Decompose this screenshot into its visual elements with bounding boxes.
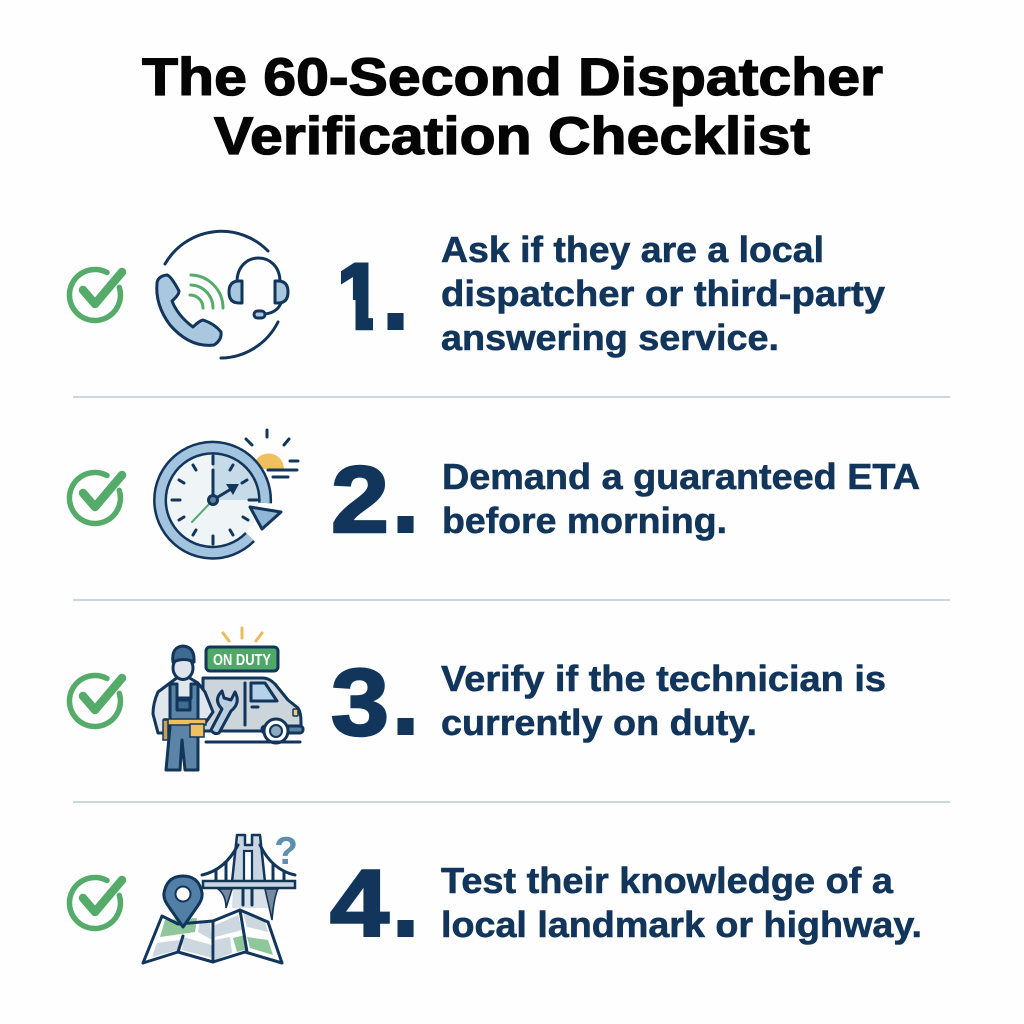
step 3 text: Verify if the technician is <box>441 658 886 699</box>
step number 4: . <box>390 835 421 962</box>
panel: step 4 <box>69 830 922 963</box>
icon: phone and headset <box>157 231 288 358</box>
step number 2 <box>331 431 421 558</box>
step 3 text <box>441 658 886 743</box>
technician figure <box>153 646 213 770</box>
step 4 text: Test their knowledge of a <box>441 860 894 901</box>
icon: green check 2 <box>69 472 122 523</box>
step 1 text: answering service. <box>441 317 779 358</box>
step 3 text: currently on duty. <box>441 702 757 743</box>
icon: green check 1 <box>69 269 122 320</box>
step 1 text: dispatcher or third-party <box>441 273 885 314</box>
map <box>143 910 282 963</box>
title: The 60-Second Dispatcher <box>142 48 883 107</box>
map pin <box>164 876 202 927</box>
step number 4 <box>330 835 421 962</box>
title <box>142 48 883 166</box>
step 4 text: local landmark or highway. <box>441 904 922 945</box>
icon: technician, van and on-duty sign: ON DUTY <box>213 652 271 669</box>
step number 2: 2 <box>331 447 389 553</box>
step 1 text: Ask if they are a local <box>441 229 824 270</box>
panel: step 2 <box>69 430 920 558</box>
step number 2: . <box>390 431 421 558</box>
step number 4: 4 <box>330 851 389 957</box>
icon: technician, van and on-duty sign <box>153 628 303 770</box>
icon: clock with sun <box>160 430 298 553</box>
step 2 text: Demand a guaranteed ETA <box>442 456 920 497</box>
step number 1: 1 <box>332 244 385 350</box>
title: Verification Checklist <box>214 107 810 166</box>
step number 1: . <box>380 228 411 355</box>
icon: wrench <box>211 691 237 734</box>
infographic canvas <box>66 56 950 964</box>
question mark: ? <box>274 830 298 873</box>
panel: step 3 <box>69 628 886 770</box>
step 1 text <box>441 229 885 358</box>
step 2 text: before morning. <box>442 500 727 541</box>
step 4 text <box>441 860 922 945</box>
icon: green check 3 <box>69 675 122 726</box>
step number 3 <box>331 633 421 760</box>
bridge <box>202 835 295 920</box>
step number 3: 3 <box>331 650 389 756</box>
icon: bridge, question mark and map <box>143 830 298 963</box>
panel: step 1 <box>69 228 885 358</box>
icon: green check 4 <box>69 877 122 928</box>
step number 3: . <box>390 633 421 760</box>
step 2 text <box>442 456 920 541</box>
step number 1 <box>341 262 404 330</box>
